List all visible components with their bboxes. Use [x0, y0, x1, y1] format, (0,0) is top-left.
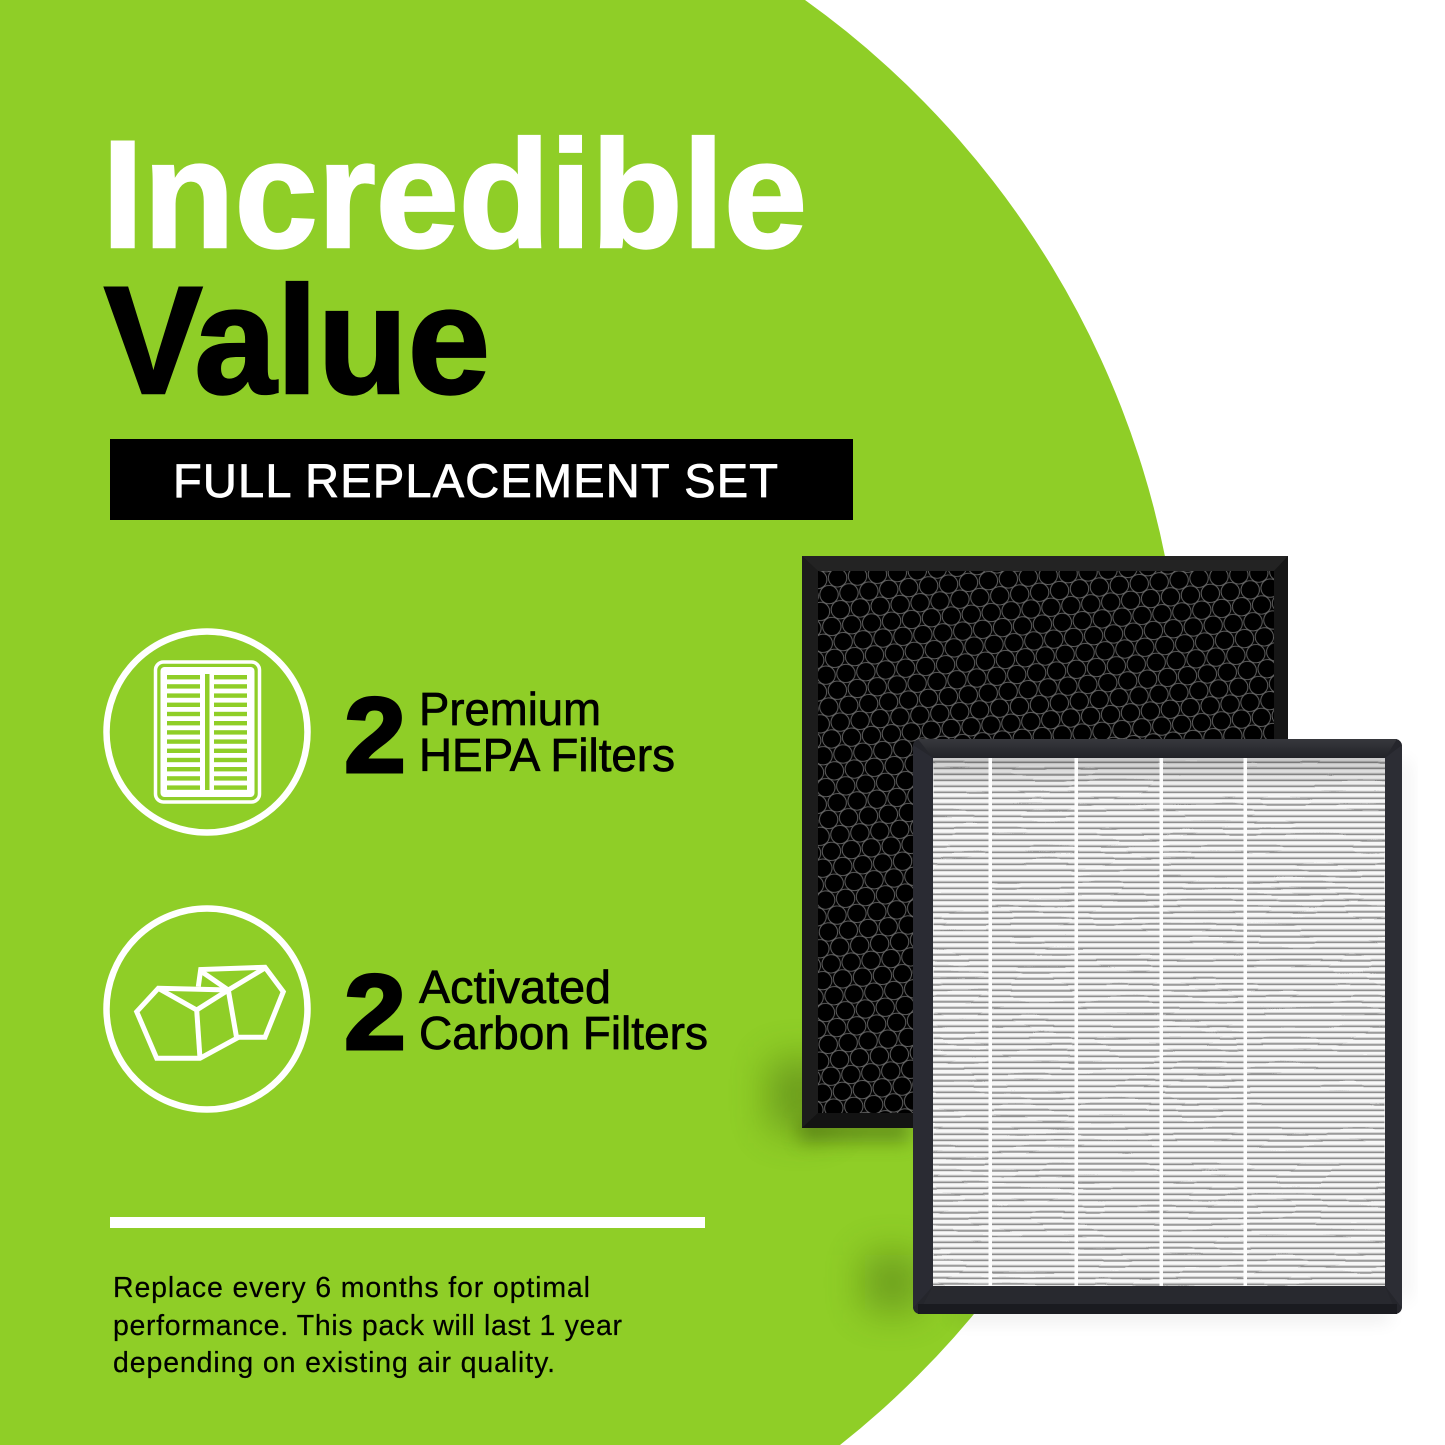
text: 2 activated carbon filters: 2 [344, 952, 406, 1072]
banner: full replacement set: FULL REPLACEMENT SET [173, 454, 778, 507]
pleated media [933, 758, 1385, 1286]
icon: HEPA filter [106, 632, 308, 832]
text: 2 premium HEPA filters: HEPA Filters [419, 729, 675, 781]
title [102, 109, 807, 426]
activated carbon filter [802, 556, 1288, 1128]
text: replacement note [113, 1272, 622, 1379]
HEPA filter [913, 739, 1402, 1314]
icon: activated carbon [106, 908, 308, 1110]
text: 2 premium HEPA filters: Premium [419, 683, 601, 735]
pleat separators [988, 758, 1247, 1286]
text: replacement note: Replace every 6 months for optimal [113, 1272, 590, 1304]
text: 2 activated carbon filters: Carbon Filters [419, 1007, 708, 1059]
text: replacement note: performance. This pack will last 1 year [113, 1310, 622, 1342]
text: 2 activated carbon filters [344, 952, 708, 1072]
shadows behind filters [770, 760, 1408, 1320]
banner: full replacement set [110, 439, 853, 520]
text: 2 premium HEPA filters: 2 [344, 675, 406, 795]
text: 2 premium HEPA filters [344, 675, 675, 795]
divider line [110, 1217, 705, 1228]
title: Value [104, 255, 490, 426]
text: 2 activated carbon filters: Activated [419, 961, 611, 1013]
title: Incredible [102, 109, 807, 280]
text: replacement note: depending on existing air quality. [113, 1347, 555, 1379]
